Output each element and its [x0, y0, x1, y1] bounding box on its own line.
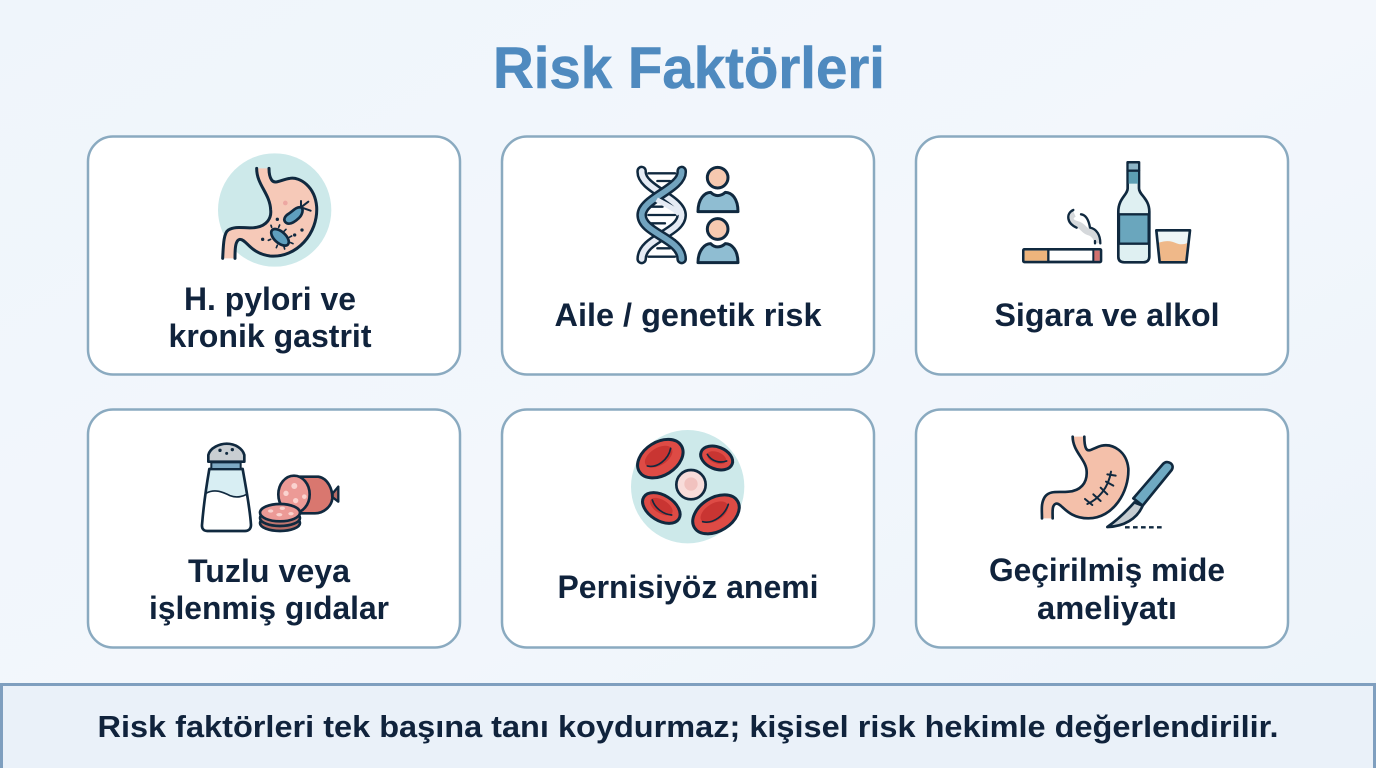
label: kronik gastrit	[168, 318, 372, 354]
label: Geçirilmiş mide	[989, 552, 1225, 588]
label	[168, 281, 372, 354]
label: ameliyatı	[1037, 590, 1177, 626]
panel: smoking and alcohol	[916, 136, 1288, 374]
panel: previous stomach surgery	[916, 410, 1288, 648]
label: işlenmiş gıdalar	[149, 590, 389, 626]
panel: H. pylori and chronic gastritis	[88, 136, 460, 374]
icon: red blood cells	[631, 430, 746, 543]
title: Risk Faktörleri	[493, 36, 885, 101]
label: H. pylori ve	[184, 281, 356, 317]
label: Pernisiyöz anemi	[558, 569, 818, 605]
icon: DNA helix and two people	[642, 167, 738, 263]
icon: stomach with bacteria	[218, 153, 331, 267]
icon: salt shaker and sausage	[202, 444, 338, 531]
label	[989, 552, 1225, 626]
footer text: Risk faktörleri tek başına tanı koydurmaz; kişisel risk hekimle değerlendirilir.	[98, 709, 1278, 744]
panel: family and genetic risk	[502, 136, 874, 374]
label	[149, 553, 389, 626]
icon: stomach with stitches and scalpel	[1042, 437, 1173, 527]
label: Tuzlu veya	[188, 553, 350, 589]
label: Sigara ve alkol	[994, 297, 1220, 333]
icon: cigarette, bottle and glass	[1023, 162, 1190, 262]
callout: footer note	[2, 684, 1374, 768]
label: Aile / genetik risk	[554, 297, 822, 333]
panel: salty or processed foods	[88, 410, 460, 648]
panel: pernicious anemia	[502, 410, 874, 648]
